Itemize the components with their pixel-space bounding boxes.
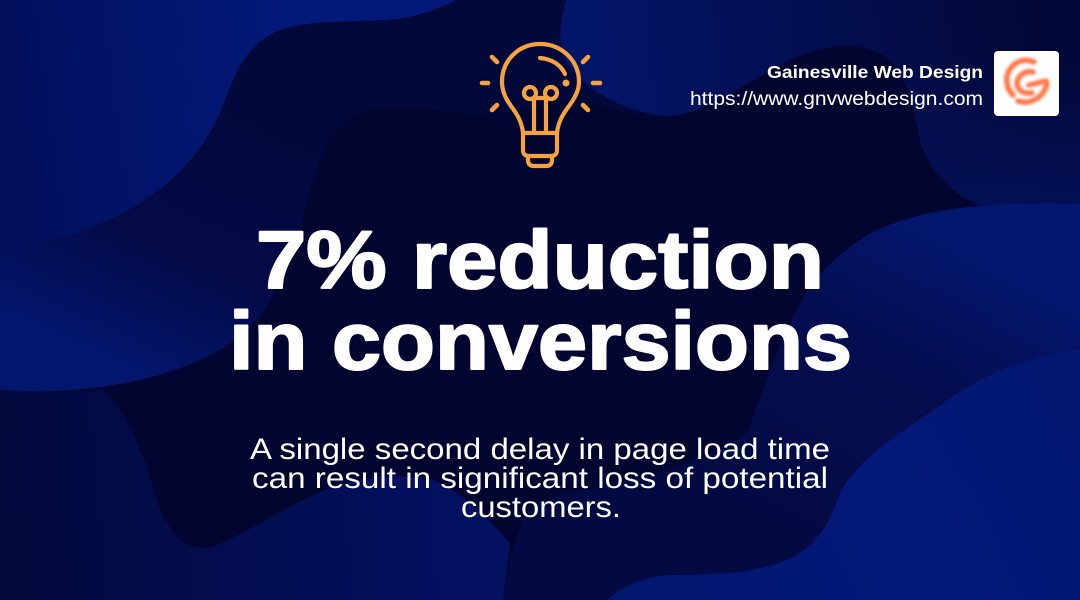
icon: highlight dot <box>565 82 567 84</box>
logo <box>994 51 1059 116</box>
title <box>229 215 852 387</box>
subtitle text: can result in significant loss of potential <box>252 462 828 495</box>
title: in conversions <box>229 296 852 387</box>
company name: Gainesville Web Design <box>767 62 983 82</box>
icon: bulb outline <box>502 44 579 133</box>
icon: bulb cap <box>528 156 552 166</box>
company url: https://www.gnvwebdesign.com <box>690 89 983 110</box>
icon: light rays <box>482 57 600 110</box>
subtitle text: customers. <box>461 491 621 524</box>
icon: filament <box>524 87 557 133</box>
icon: highlight <box>540 58 565 74</box>
title: 7% reduction <box>256 215 824 306</box>
subtitle text: A single second delay in page load time <box>250 433 830 466</box>
icon: light bulb <box>482 44 600 166</box>
icon: bulb base <box>523 133 557 156</box>
subtitle text <box>250 433 830 524</box>
